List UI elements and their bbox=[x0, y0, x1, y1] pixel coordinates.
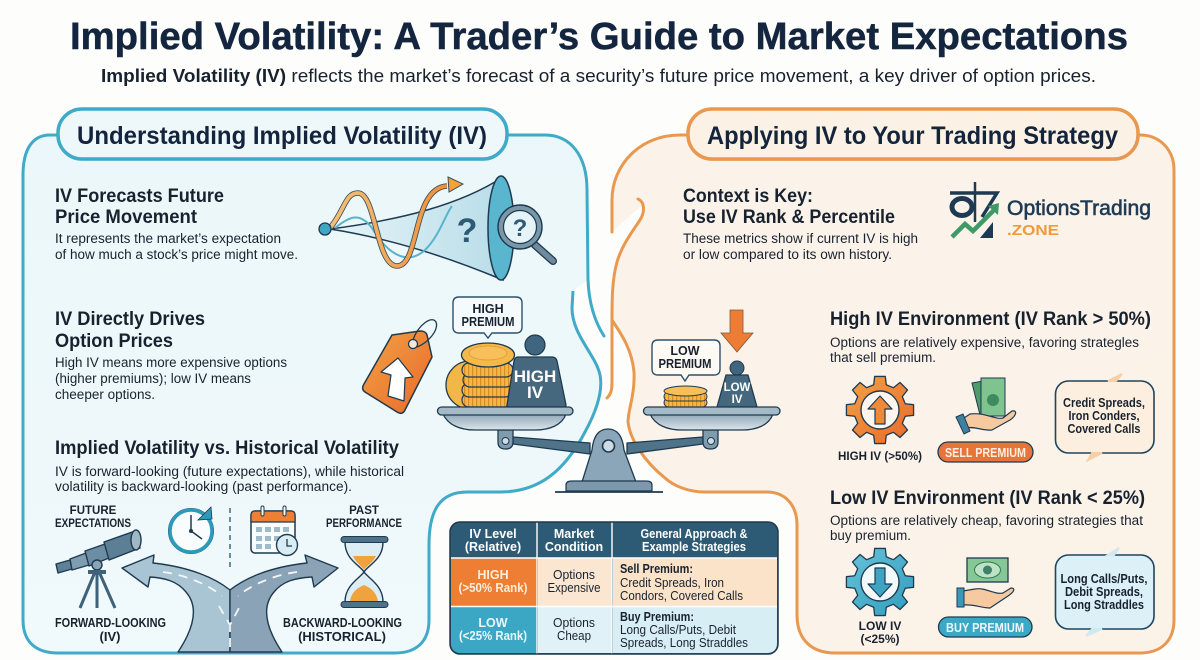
arrow: downward orange bbox=[721, 310, 753, 352]
text block: IV drives option prices: cheeper options. bbox=[55, 387, 155, 402]
icon: volatility cone with magnifier: ? bbox=[513, 215, 527, 242]
icon: volatility cone with magnifier: ? bbox=[457, 212, 477, 250]
label: future expectations bbox=[55, 505, 131, 530]
text block: context is key: or low compared to its own history. bbox=[683, 247, 892, 262]
weight: high IV bbox=[507, 335, 566, 407]
text block: IV drives option prices: High IV means more expensive options bbox=[55, 355, 287, 370]
label: forward-looking bbox=[55, 615, 166, 644]
icon: diverging road arrows bbox=[122, 555, 338, 652]
text block: IV drives option prices: Option Prices bbox=[55, 330, 173, 352]
text block: context is key: Context is Key: bbox=[683, 185, 813, 207]
heading pill: applying: Applying IV to Your Trading Strategy bbox=[707, 122, 1118, 150]
text block: context is key bbox=[683, 185, 918, 262]
badge: buy premium: BUY PREMIUM bbox=[946, 621, 1024, 635]
icon: clock with arrow bbox=[168, 507, 214, 554]
icon: telescope bbox=[56, 530, 141, 608]
panel: understanding implied volatility bbox=[23, 109, 604, 653]
label: low IV threshold: (<25%) bbox=[860, 632, 900, 646]
text block: high IV environment bbox=[830, 308, 1151, 365]
speech bubble: high premium: HIGH bbox=[472, 302, 504, 316]
table: IV level summary: Credit Spreads, Iron bbox=[620, 576, 724, 590]
icon: calendar with clock bbox=[251, 506, 298, 556]
text block: high IV environment: that sell premium. bbox=[830, 350, 936, 365]
table: IV level summary: HIGH bbox=[477, 568, 509, 582]
icon: hand holding cash bbox=[956, 378, 1016, 434]
weight: high IV: HIGH bbox=[514, 367, 556, 386]
table: IV level summary: (Relative) bbox=[465, 540, 521, 554]
badge: buy premium bbox=[938, 617, 1032, 637]
table: IV level summary: (>50% Rank) bbox=[458, 581, 528, 595]
icon: hand receiving cash bbox=[957, 558, 1014, 608]
table: IV level summary: Spreads, Long Straddles bbox=[620, 636, 748, 650]
text block: IV drives option prices bbox=[55, 308, 287, 402]
label: backward-looking bbox=[283, 615, 402, 644]
weight: low IV bbox=[717, 361, 757, 407]
label: backward-looking: BACKWARD-LOOKING bbox=[283, 615, 402, 630]
label: forward-looking: (IV) bbox=[100, 629, 120, 644]
logo: OptionsTrading.Zone: .ZONE bbox=[1007, 222, 1059, 239]
icon: low IV comparison bbox=[652, 310, 757, 407]
logo: OptionsTrading.Zone: OptionsTrading bbox=[1007, 197, 1151, 220]
label: low IV threshold: LOW IV bbox=[859, 619, 901, 633]
callout: sell strategies: Iron Conders, bbox=[1068, 409, 1140, 423]
text block: context is key: Use IV Rank & Percentile bbox=[683, 206, 895, 228]
table: IV level summary bbox=[450, 522, 778, 654]
heading pill: understanding bbox=[58, 109, 507, 161]
callout: buy strategies: Debit Spreads, bbox=[1065, 585, 1143, 599]
label: forward-looking: FORWARD-LOOKING bbox=[55, 615, 166, 630]
text block: IV vs historical: Implied Volatility vs. Historical Volatility bbox=[55, 437, 399, 459]
table: IV level summary: IV Level bbox=[469, 527, 517, 541]
table: IV level summary: Buy Premium: bbox=[620, 610, 694, 624]
label: high IV threshold: HIGH IV (>50%) bbox=[838, 449, 922, 463]
text block: low IV environment: Options are relatively cheap, favoring strategies that bbox=[830, 513, 1143, 528]
table: IV level summary: Example Strategies bbox=[642, 540, 746, 554]
text block: IV forecasts: IV Forecasts Future bbox=[55, 185, 224, 207]
speech bubble: low premium bbox=[652, 340, 720, 381]
text block: IV vs historical bbox=[55, 437, 404, 494]
text block: IV forecasts: of how much a stock’s price might move. bbox=[55, 247, 298, 262]
panel: applying IV to your trading strategy bbox=[607, 109, 1174, 653]
logo: OptionsTrading.Zone bbox=[950, 182, 1151, 239]
label: future expectations: EXPECTATIONS bbox=[55, 518, 131, 530]
text block: high IV environment: Options are relatively expensive, favoring strategles bbox=[830, 335, 1139, 350]
table: IV level summary: (<25% Rank) bbox=[459, 629, 527, 643]
table: IV level summary: Condition bbox=[545, 540, 603, 554]
table: IV level summary: General Approach & bbox=[640, 527, 748, 541]
scale: balance with two pans bbox=[438, 407, 780, 492]
callout: sell strategies bbox=[1056, 374, 1154, 460]
icon: high IV gear bbox=[846, 376, 914, 444]
speech bubble: low premium: PREMIUM bbox=[658, 357, 712, 371]
text block: IV forecasts bbox=[55, 185, 298, 262]
table: IV level summary: Cheap bbox=[557, 629, 591, 643]
table: IV level summary: Options bbox=[553, 616, 595, 630]
badge: sell premium bbox=[938, 442, 1033, 462]
subtitle: Implied Volatility (IV) reflects the market’s forecast of a security’s future price movement, a key driver of option prices. bbox=[101, 65, 1096, 86]
text block: IV forecasts: It represents the market’s expectation bbox=[55, 231, 281, 246]
icon: high IV comparison bbox=[446, 297, 566, 409]
table: IV level summary: Market bbox=[554, 527, 595, 541]
text block: low IV environment: buy premium. bbox=[830, 528, 911, 543]
divider: dashed line bbox=[229, 508, 231, 570]
label: past performance: PAST bbox=[349, 505, 379, 517]
icon: price tag with up arrow bbox=[363, 320, 437, 413]
text block: low IV environment: Low IV Environment (IV Rank < 25%) bbox=[830, 487, 1145, 509]
coin stack: low premium bbox=[664, 386, 707, 407]
table: IV level summary: LOW bbox=[478, 616, 508, 630]
callout: buy strategies: Long Straddles bbox=[1064, 598, 1144, 612]
label: past performance bbox=[326, 505, 402, 530]
icon: volatility cone with magnifier bbox=[319, 176, 553, 280]
table: IV level summary: Sell Premium: bbox=[620, 562, 693, 576]
table: IV level summary: Expensive bbox=[548, 581, 601, 595]
text block: context is key: These metrics show if current IV is high bbox=[683, 231, 918, 246]
weight: high IV: IV bbox=[527, 383, 544, 402]
label: backward-looking: (HISTORICAL) bbox=[298, 629, 386, 644]
text block: IV forecasts: Price Movement bbox=[55, 206, 197, 228]
icon: low IV gear bbox=[846, 548, 914, 616]
callout: sell strategies: Credit Spreads, bbox=[1063, 396, 1145, 410]
table: IV level summary: Options bbox=[553, 568, 595, 582]
callout: sell strategies: Covered Calls bbox=[1068, 422, 1141, 436]
icon: hourglass bbox=[341, 536, 388, 608]
label: future expectations: FUTURE bbox=[70, 505, 117, 517]
label: low IV threshold bbox=[859, 619, 901, 646]
heading pill: applying bbox=[688, 109, 1138, 161]
label: past performance: PERFORMANCE bbox=[326, 518, 402, 530]
text block: IV vs historical: IV is forward-looking (future expectations), while historical bbox=[55, 464, 404, 479]
speech bubble: high premium: PREMIUM bbox=[462, 315, 514, 329]
table: IV level summary: Condors, Covered Calls bbox=[620, 589, 743, 603]
text block: IV vs historical: volatility is backward-looking (past performance). bbox=[55, 479, 352, 494]
text block: high IV environment: High IV Environment (IV Rank > 50%) bbox=[830, 308, 1151, 330]
heading pill: understanding: Understanding Implied Volatility (IV) bbox=[77, 122, 487, 150]
text block: IV drives option prices: (higher premiums); low IV means bbox=[55, 371, 251, 386]
text block: IV drives option prices: IV Directly Drives bbox=[55, 308, 205, 330]
callout: buy strategies: Long Calls/Puts, bbox=[1060, 572, 1148, 586]
weight: low IV: LOW bbox=[724, 382, 751, 394]
speech bubble: low premium: LOW bbox=[670, 344, 700, 358]
weight: low IV: IV bbox=[732, 394, 743, 406]
text block: low IV environment bbox=[830, 487, 1145, 543]
badge: sell premium: SELL PREMIUM bbox=[945, 446, 1026, 460]
speech bubble: high premium bbox=[453, 297, 522, 338]
callout: buy strategies bbox=[1056, 548, 1154, 636]
table: IV level summary: Long Calls/Puts, Debit bbox=[620, 623, 736, 637]
coin stack: high premium bbox=[446, 343, 514, 409]
title: Implied Volatility: A Trader’s Guide to Market Expectations bbox=[70, 16, 1128, 58]
